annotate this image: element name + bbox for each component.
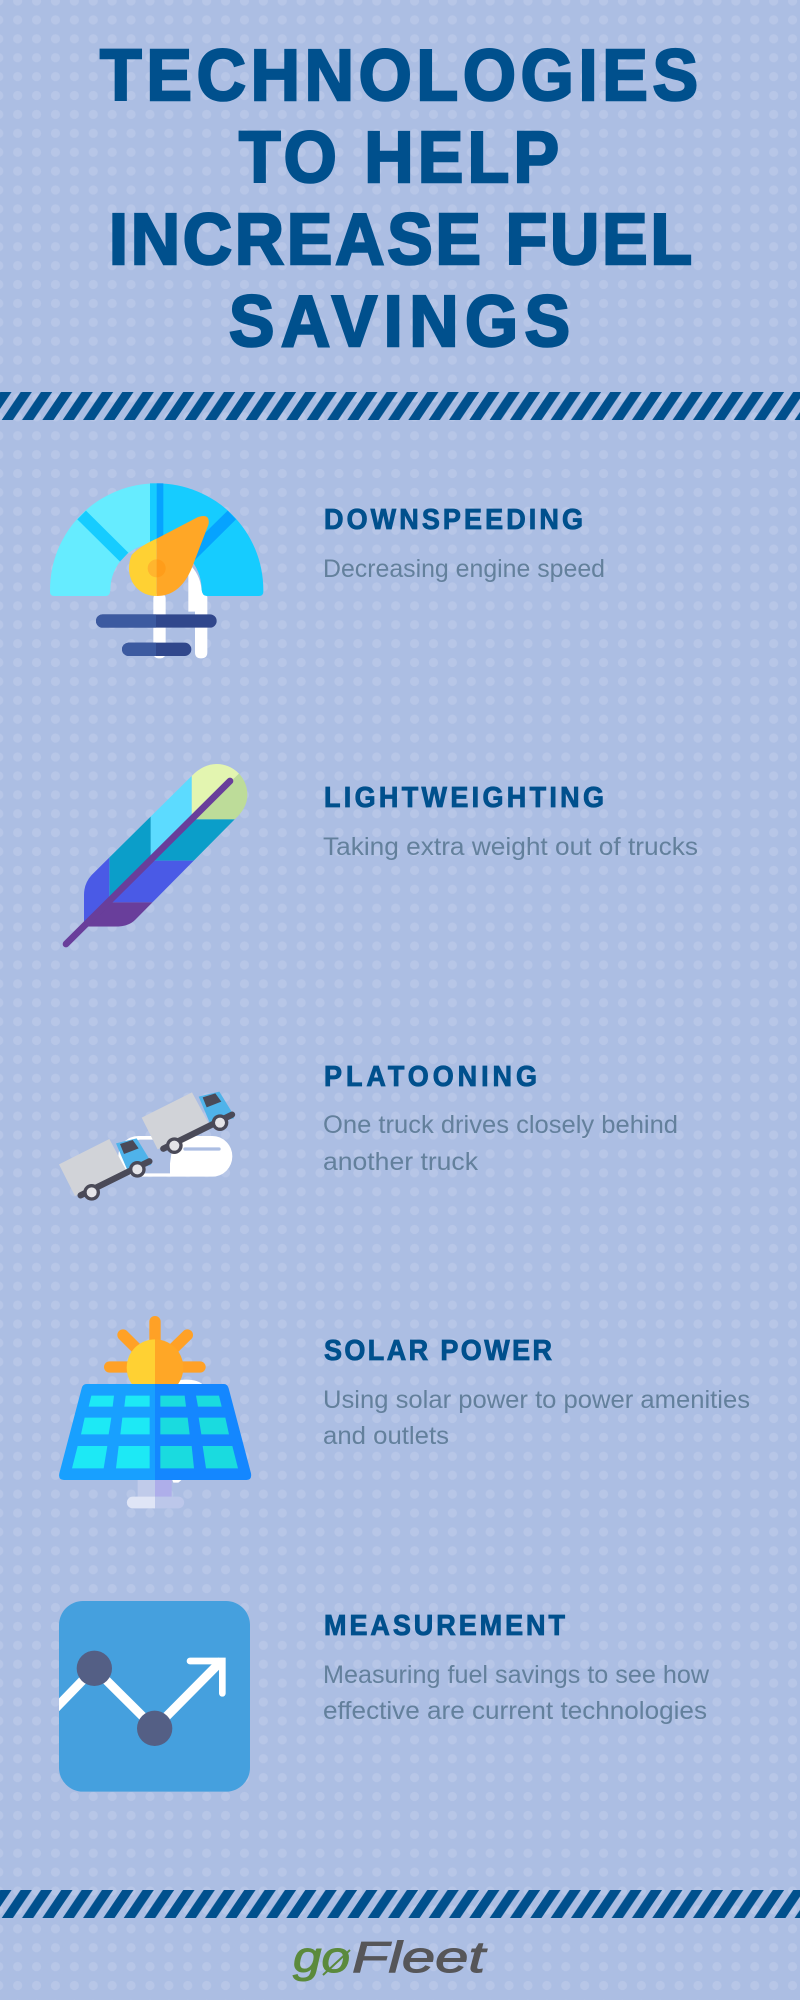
text: solar power: and outlets	[323, 1422, 449, 1450]
text: lightweighting: LIGHTWEIGHTING	[324, 781, 604, 813]
icon: platooning trucks	[59, 1092, 234, 1201]
title: SAVINGS	[229, 280, 570, 361]
icon: solar panel	[59, 1322, 251, 1508]
title: TECHNOLOGIES	[100, 34, 698, 115]
text: platooning: One truck drives closely behind	[323, 1111, 678, 1139]
title: INCREASE FUEL	[109, 198, 692, 279]
text: measurement: MEASUREMENT	[324, 1609, 565, 1641]
truck rear	[59, 1138, 151, 1201]
text: downspeeding	[323, 503, 605, 583]
text: measurement: effective are current technologies	[323, 1697, 707, 1725]
logo: goFleet: Fleet	[352, 1933, 487, 1982]
text: solar power	[323, 1334, 750, 1450]
icon: feather	[66, 757, 263, 944]
striped divider top	[0, 392, 800, 420]
text: measurement: Measuring fuel savings to see how	[323, 1661, 710, 1689]
title	[100, 34, 698, 361]
title: TO HELP	[239, 116, 559, 197]
text: platooning: another truck	[323, 1148, 479, 1176]
icon: measurement chart	[53, 1601, 250, 1792]
text: measurement	[323, 1609, 710, 1725]
icon: speedometer	[50, 483, 263, 658]
truck front	[142, 1092, 234, 1154]
text: platooning: PLATOONING	[324, 1060, 537, 1092]
text: solar power: SOLAR POWER	[324, 1334, 552, 1366]
text: solar power: Using solar power to power amenities	[323, 1386, 750, 1414]
striped divider bottom	[0, 1890, 800, 1918]
logo: goFleet	[293, 1933, 487, 1982]
text: platooning	[323, 1060, 678, 1176]
logo: goFleet: go	[293, 1933, 350, 1982]
text: lightweighting: Taking extra weight out of trucks	[323, 833, 698, 861]
text: lightweighting	[323, 781, 698, 861]
text: downspeeding: DOWNSPEEDING	[324, 503, 583, 535]
text: downspeeding: Decreasing engine speed	[323, 555, 605, 583]
